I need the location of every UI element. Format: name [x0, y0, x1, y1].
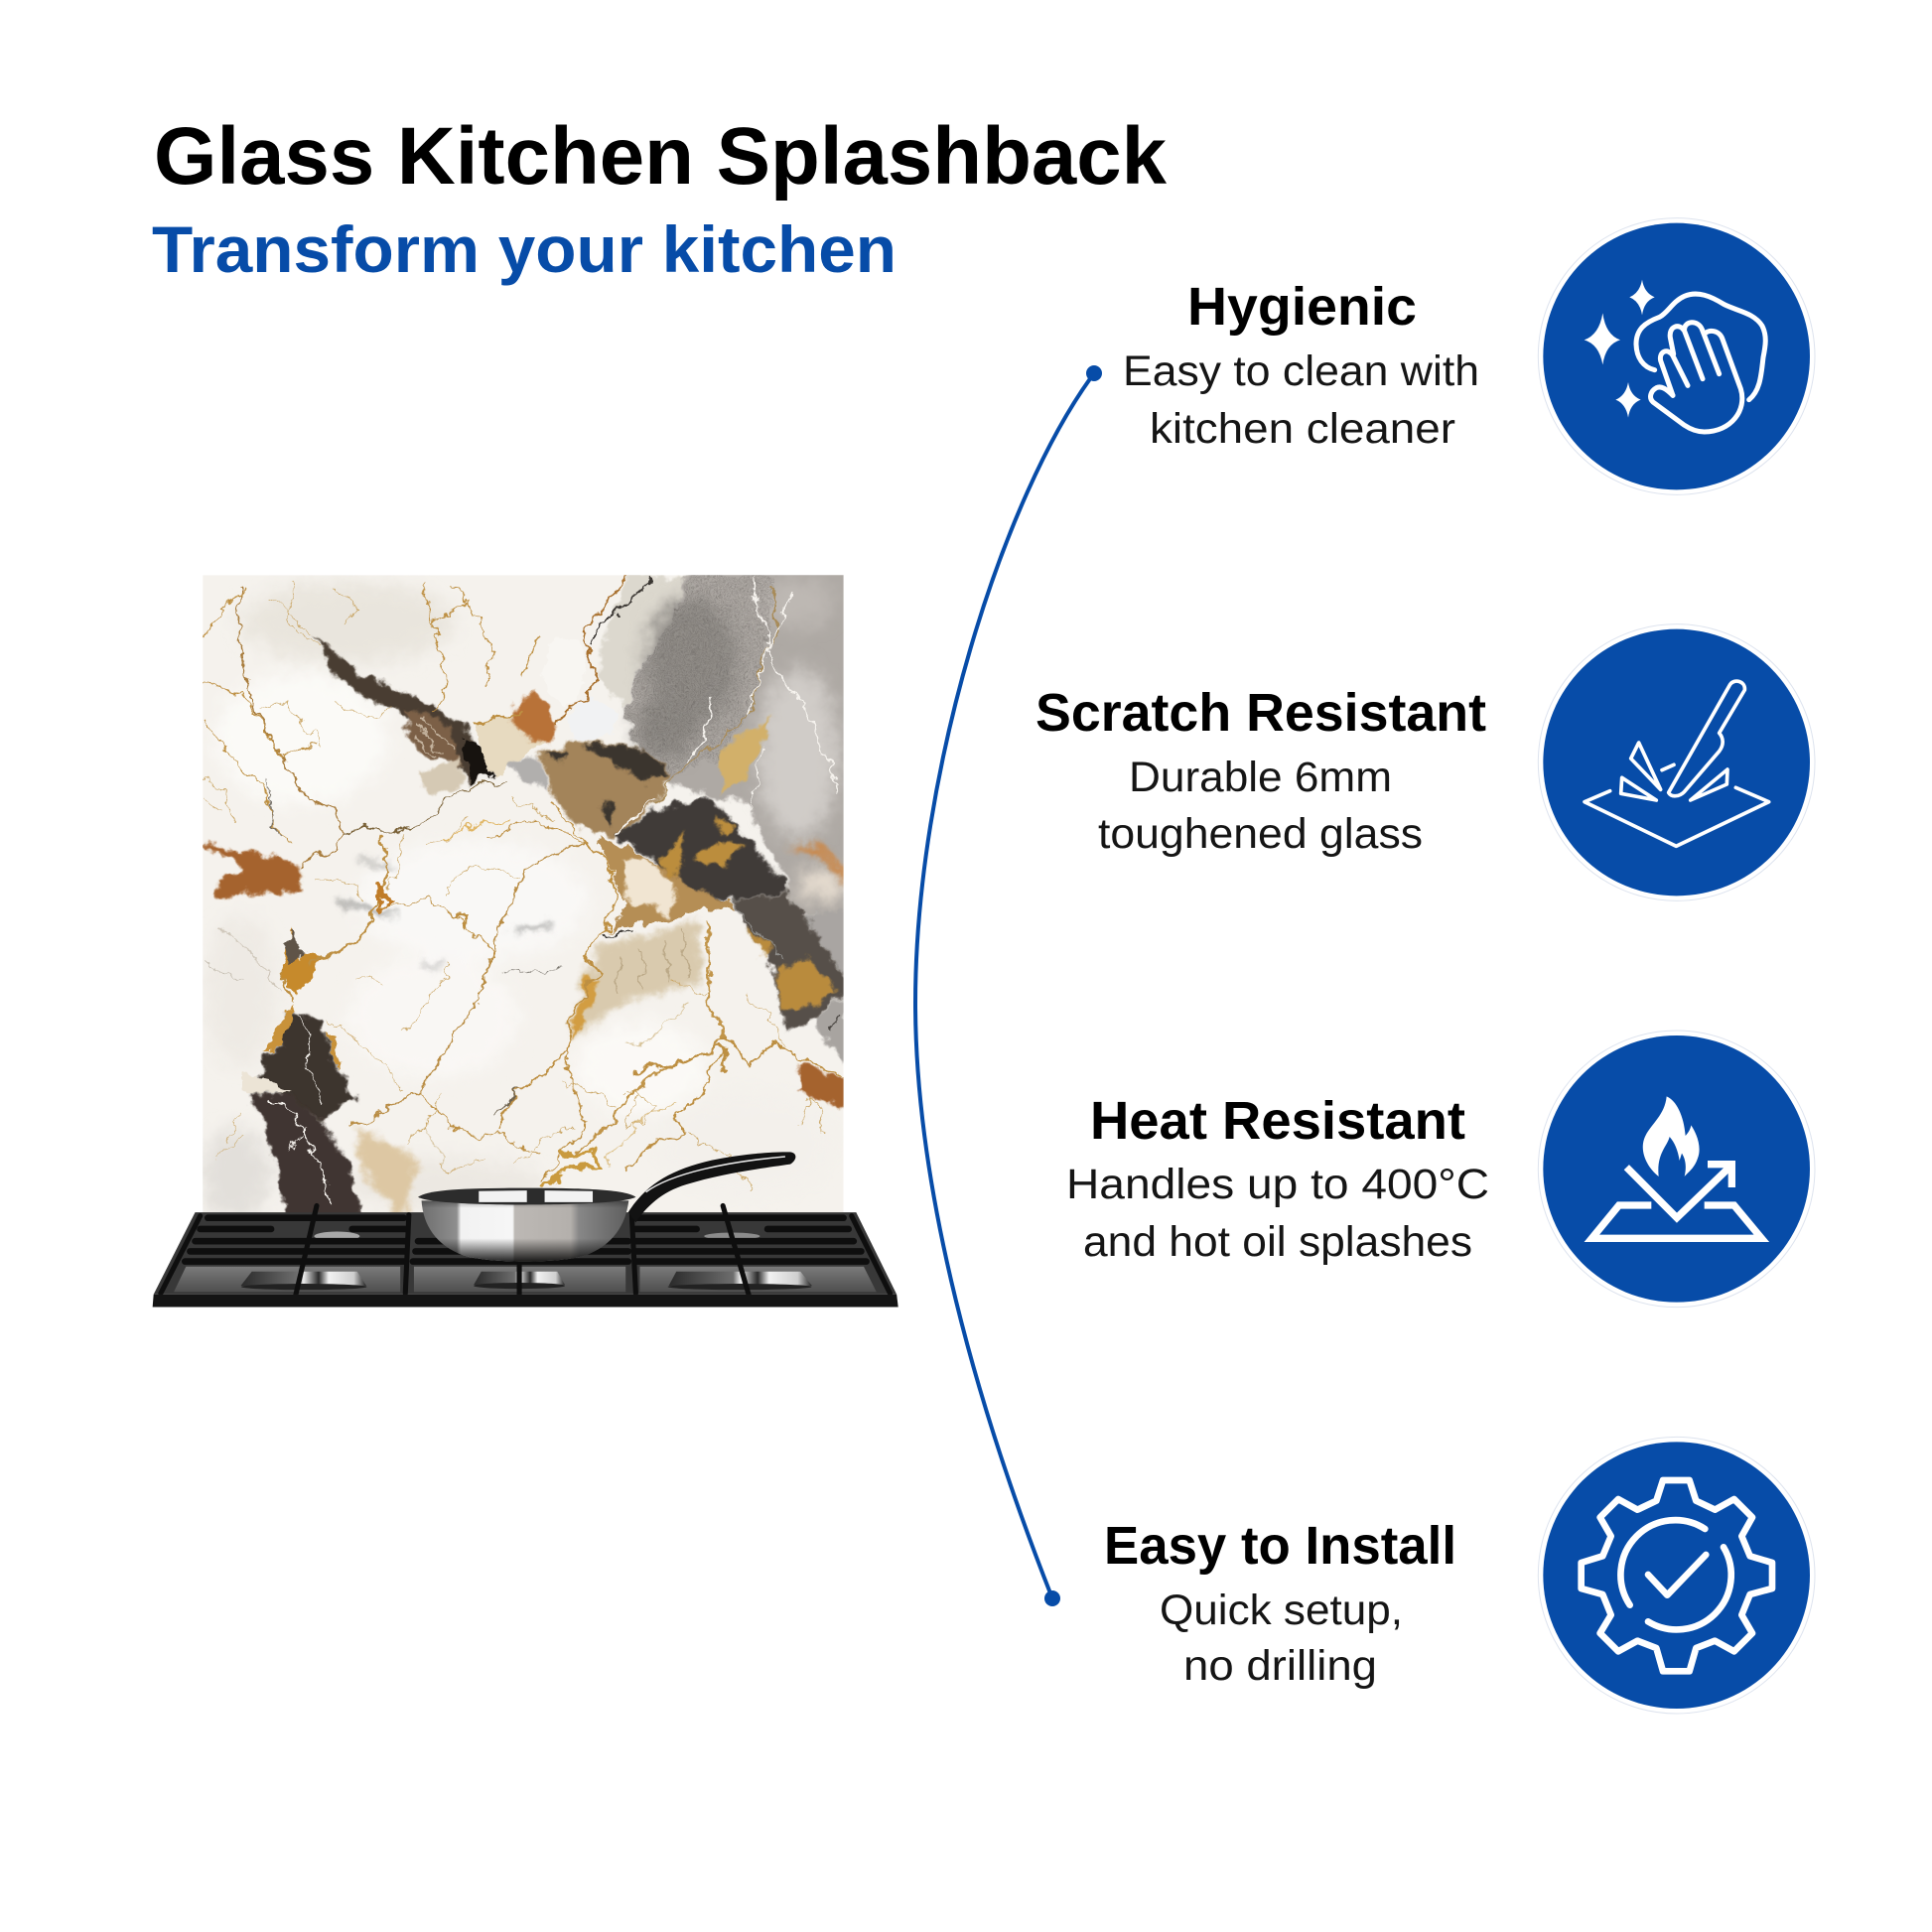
gray blurred marks: [337, 861, 550, 967]
description: [1066, 1161, 1489, 1266]
feature: Heat Resistant: [1066, 1091, 1489, 1266]
white blobs: [543, 635, 587, 702]
connector curve: [915, 365, 1102, 1606]
veins: [203, 577, 844, 1189]
grain on gray: [625, 575, 777, 779]
gray marble area: [625, 567, 854, 926]
marble panel: [196, 567, 854, 1225]
description: [1098, 754, 1423, 858]
description: [1160, 1587, 1403, 1690]
burners: [240, 1232, 812, 1290]
description: Durable 6mm: [1129, 754, 1392, 801]
dark patch bottom left lower: [251, 1093, 362, 1225]
icon: knife scratching surface: [1538, 624, 1815, 900]
cream break: [243, 1075, 291, 1093]
icon: gear with check mark: [1538, 1437, 1815, 1714]
gold patch on gray: [717, 719, 772, 792]
description: Quick setup,: [1160, 1587, 1403, 1634]
gold spot: [280, 926, 325, 995]
fine veins: [203, 582, 826, 1189]
description: kitchen cleaner: [1150, 405, 1455, 453]
orange smear right: [787, 843, 849, 886]
top dark brown vein: [314, 634, 491, 784]
dark patch bottom left upper: [258, 1013, 354, 1121]
right side gray lower: [802, 911, 844, 977]
heading: Hygienic: [1187, 277, 1417, 337]
feature: Easy to Install: [1104, 1516, 1456, 1690]
pan bowl: [422, 1200, 628, 1262]
soft tonal areas: [203, 581, 697, 1212]
heading: Scratch Resistant: [1035, 683, 1486, 743]
dark speckled band: [616, 797, 788, 903]
description: and hot oil splashes: [1083, 1218, 1472, 1266]
pan interior highlights: [479, 1190, 527, 1202]
mid gold brown area: [598, 835, 735, 931]
gas hob: [153, 1205, 898, 1308]
grates: [161, 1205, 891, 1299]
icon: flame and heat arrow: [1538, 1031, 1815, 1308]
lower dark band: [733, 894, 849, 1035]
feature: Scratch Resistant: [1035, 683, 1486, 858]
description: Handles up to 400°C: [1066, 1161, 1489, 1208]
description: Easy to clean with: [1123, 347, 1479, 395]
rust patch top: [509, 693, 555, 744]
heading: Heat Resistant: [1090, 1091, 1465, 1151]
hob front edge: [153, 1295, 898, 1308]
white veins: [271, 582, 838, 1204]
feature: Hygienic: [1123, 277, 1479, 453]
gray patch: [509, 757, 550, 787]
rust patch left: [196, 843, 302, 896]
description: toughened glass: [1098, 810, 1423, 858]
glass panels: [174, 1267, 877, 1292]
title: Glass Kitchen Splashback: [154, 111, 1167, 202]
gold striated lower: [354, 1126, 418, 1225]
subtitle: Transform your kitchen: [152, 212, 897, 286]
frying pan: [418, 1152, 795, 1262]
cream area by dark vein: [474, 714, 545, 774]
rust patch bottom right: [800, 1063, 849, 1110]
pan handle: [628, 1152, 795, 1222]
beige upper band: [596, 575, 692, 708]
hob base: [154, 1212, 897, 1295]
heading: Easy to Install: [1104, 1516, 1456, 1576]
icon: cleaning hand: [1538, 218, 1815, 494]
product image: marble splashback with hob and pan: [153, 567, 898, 1308]
striated tan patch: [570, 921, 702, 1037]
description: [1123, 347, 1479, 453]
description: no drilling: [1183, 1642, 1377, 1690]
center brown patch: [539, 742, 671, 840]
pan rim: [418, 1188, 635, 1204]
